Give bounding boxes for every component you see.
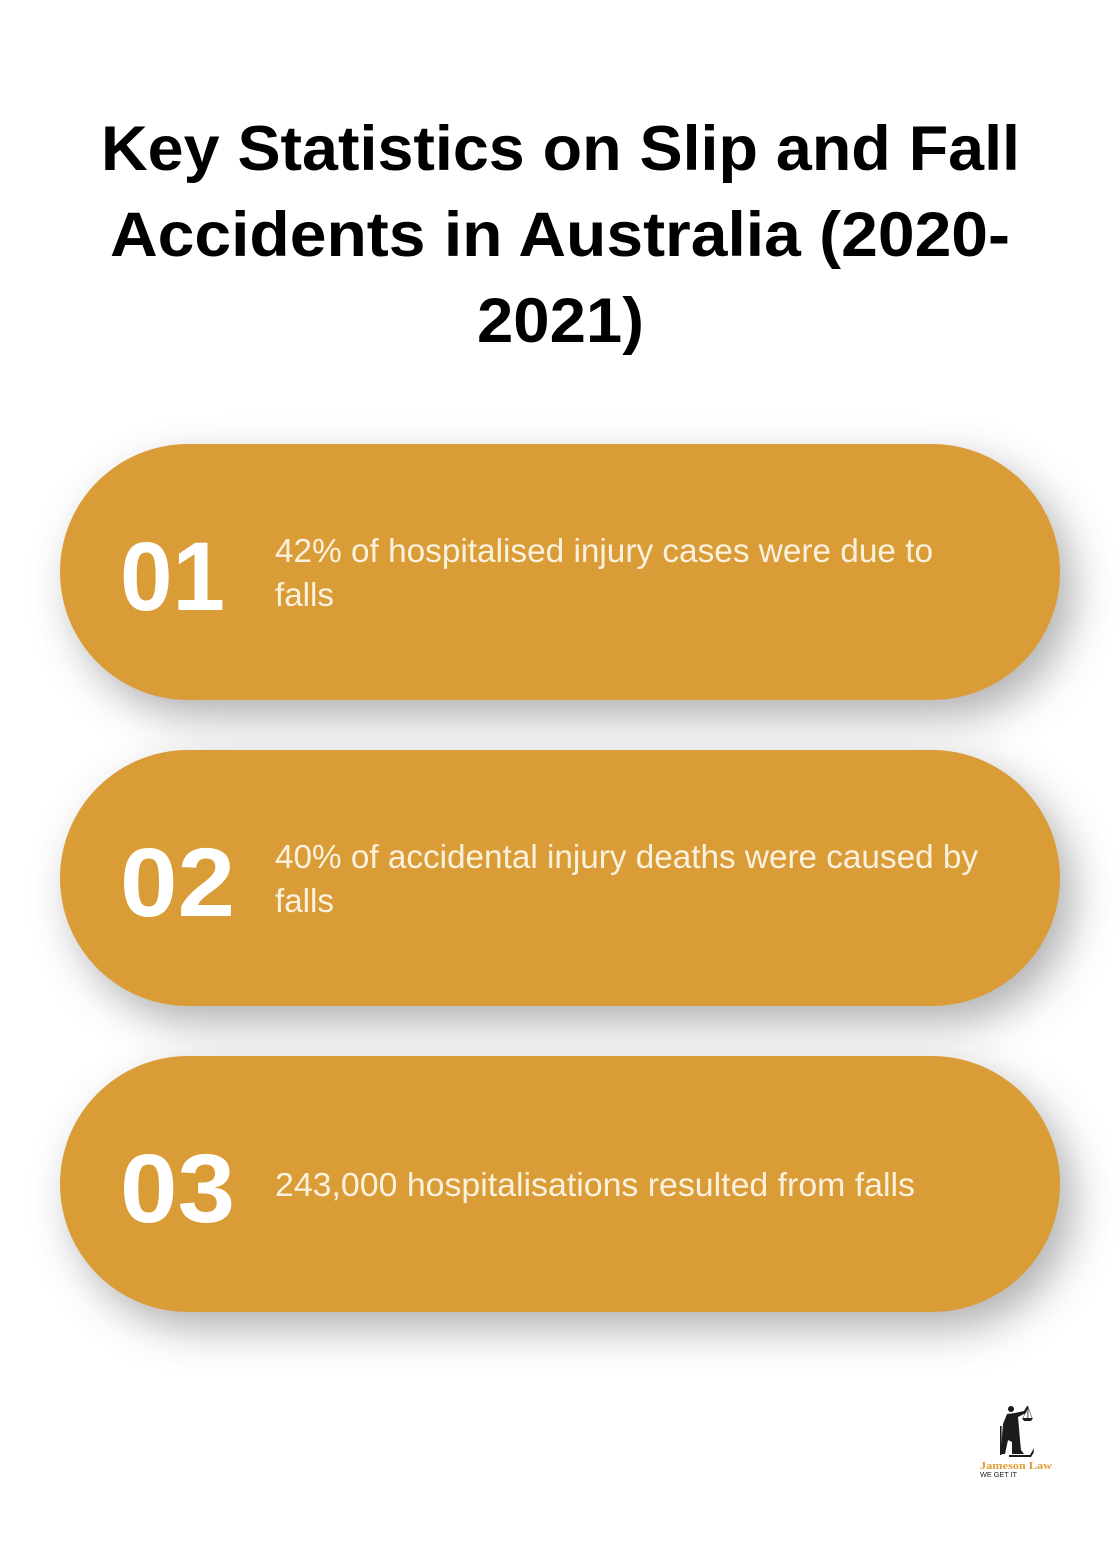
title: 2021) bbox=[477, 286, 644, 356]
text: statistic 03: 243,000 hospitalisations resulted from falls bbox=[275, 1166, 915, 1203]
logo name: Jameson Law bbox=[980, 1460, 1052, 1472]
number 02: 02 bbox=[120, 828, 235, 937]
title bbox=[101, 114, 1020, 356]
title: Key Statistics on Slip and Fall bbox=[101, 114, 1020, 184]
panel: statistic 03 background bbox=[60, 1056, 1060, 1312]
logo: Jameson Law bbox=[980, 1406, 1052, 1479]
panel: statistic 02 background bbox=[60, 750, 1060, 1006]
text: statistic 02: falls bbox=[275, 882, 334, 919]
text: statistic 02: 40% of accidental injury deaths were caused by bbox=[275, 838, 979, 875]
text: statistic 01 bbox=[275, 532, 933, 613]
text: statistic 02 bbox=[275, 838, 979, 919]
text: statistic 01: falls bbox=[275, 576, 334, 613]
number 03: 03 bbox=[120, 1134, 235, 1243]
logo tagline: WE GET IT bbox=[980, 1472, 1018, 1479]
text: statistic 01: 42% of hospitalised injury cases were due to bbox=[275, 532, 933, 569]
title: Accidents in Australia (2020- bbox=[110, 200, 1010, 270]
panel: statistic 01 background bbox=[60, 444, 1060, 700]
number 01: 01 bbox=[120, 522, 225, 631]
icon: lady justice figure bbox=[1000, 1406, 1034, 1457]
